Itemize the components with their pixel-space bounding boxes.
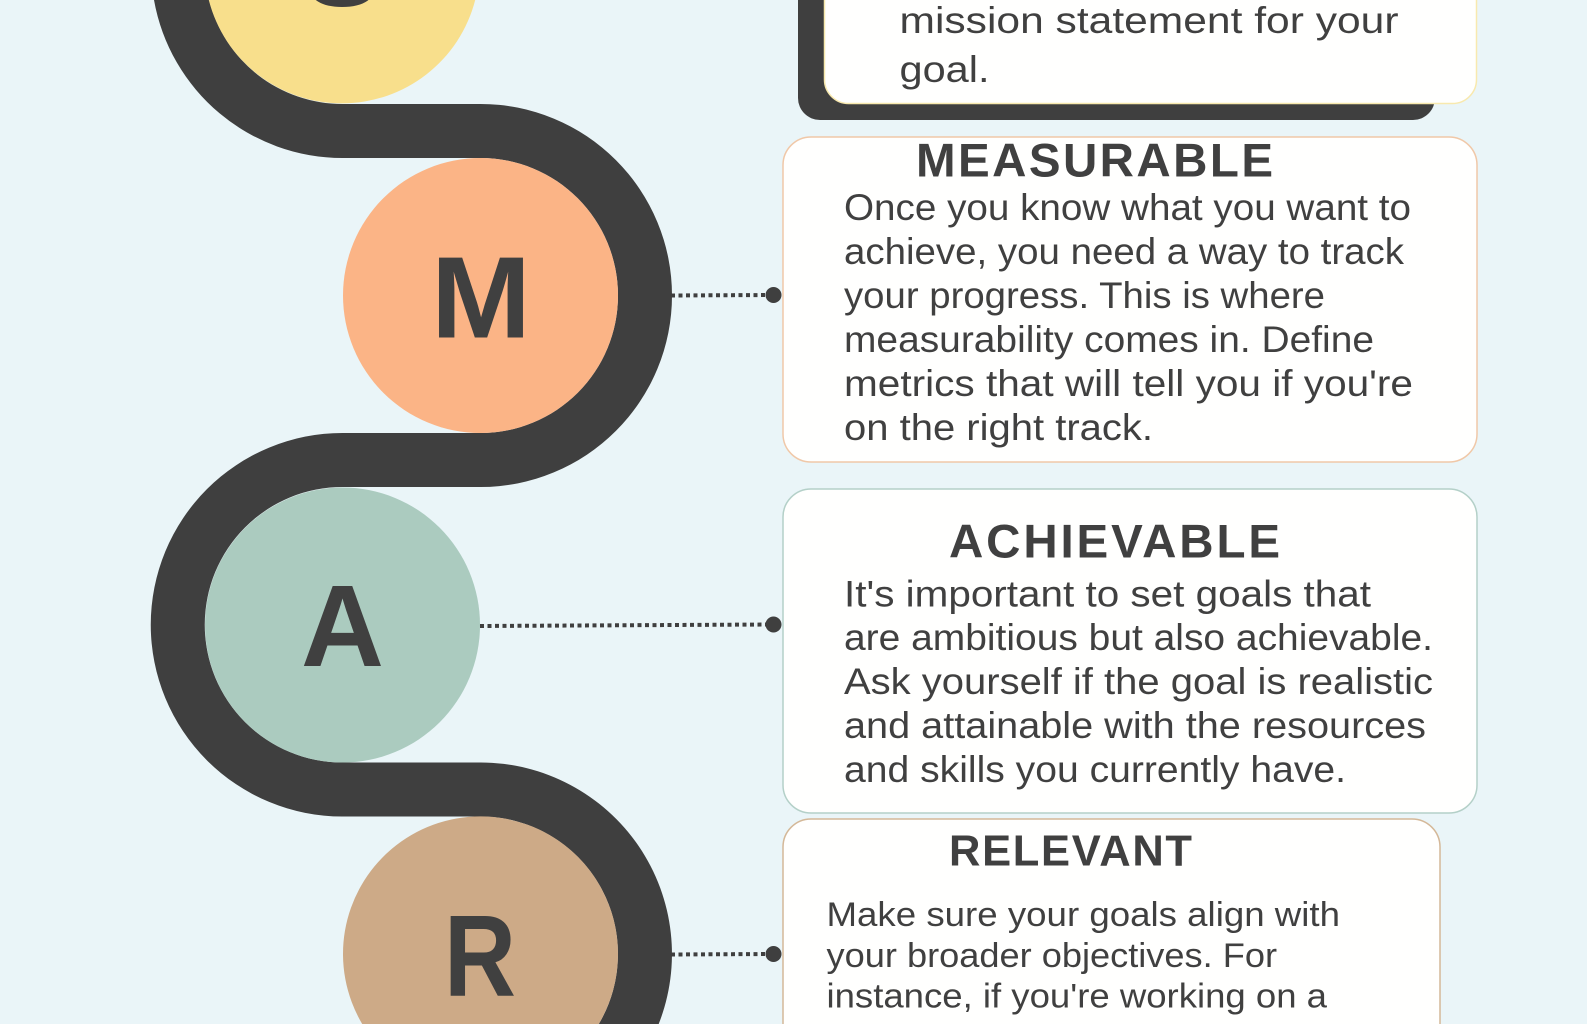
specific body text xyxy=(900,0,1398,90)
achievable body text xyxy=(844,574,1433,790)
measurable body text: measurability comes in. Define xyxy=(844,319,1374,360)
relevant body text: instance, if you're working on a xyxy=(826,978,1327,1016)
measurable body text: on the right track. xyxy=(844,407,1153,448)
connector: R xyxy=(671,946,782,962)
achievable body text: It's important to set goals that xyxy=(844,574,1372,614)
measurable body text xyxy=(844,187,1413,448)
winding road path xyxy=(151,0,672,1024)
measurable body text: metrics that will tell you if you're xyxy=(844,363,1413,404)
circle: M: M xyxy=(431,232,531,362)
circle: R xyxy=(343,816,618,1024)
connector: A xyxy=(480,616,782,632)
circle: M xyxy=(343,158,618,433)
heading: measurable: MEASURABLE xyxy=(916,134,1273,188)
achievable body text: and skills you currently have. xyxy=(844,749,1346,790)
measurable body text: your progress. This is where xyxy=(844,275,1325,316)
panel: measurable xyxy=(783,134,1477,462)
relevant body text xyxy=(826,896,1340,1016)
panel: achievable xyxy=(783,489,1477,813)
specific body text: mission statement for your xyxy=(900,0,1398,41)
circle: A xyxy=(205,488,480,762)
connector: M xyxy=(671,287,782,303)
circle: S xyxy=(209,0,475,103)
achievable body text: are ambitious but also achievable. xyxy=(844,617,1433,658)
measurable body text: Once you know what you want to xyxy=(844,187,1411,228)
relevant body text: your broader objectives. For xyxy=(826,937,1277,975)
card xyxy=(783,489,1477,813)
panel: relevant xyxy=(783,819,1440,1024)
circle: A: A xyxy=(301,561,384,691)
heading: achievable: ACHIEVABLE xyxy=(949,516,1280,568)
card xyxy=(783,137,1477,462)
relevant body text: Make sure your goals align with xyxy=(826,896,1340,934)
card xyxy=(783,819,1440,1024)
achievable body text: Ask yourself if the goal is realistic xyxy=(844,661,1433,702)
achievable body text: and attainable with the resources xyxy=(844,705,1426,746)
specific body text: goal. xyxy=(900,49,990,90)
circle: R: R xyxy=(444,891,516,1021)
measurable body text: achieve, you need a way to track xyxy=(844,231,1405,272)
panel: specific (partial) xyxy=(798,0,1476,120)
card shadow xyxy=(798,0,1435,120)
card xyxy=(824,0,1476,104)
heading: relevant: RELEVANT xyxy=(949,828,1192,876)
